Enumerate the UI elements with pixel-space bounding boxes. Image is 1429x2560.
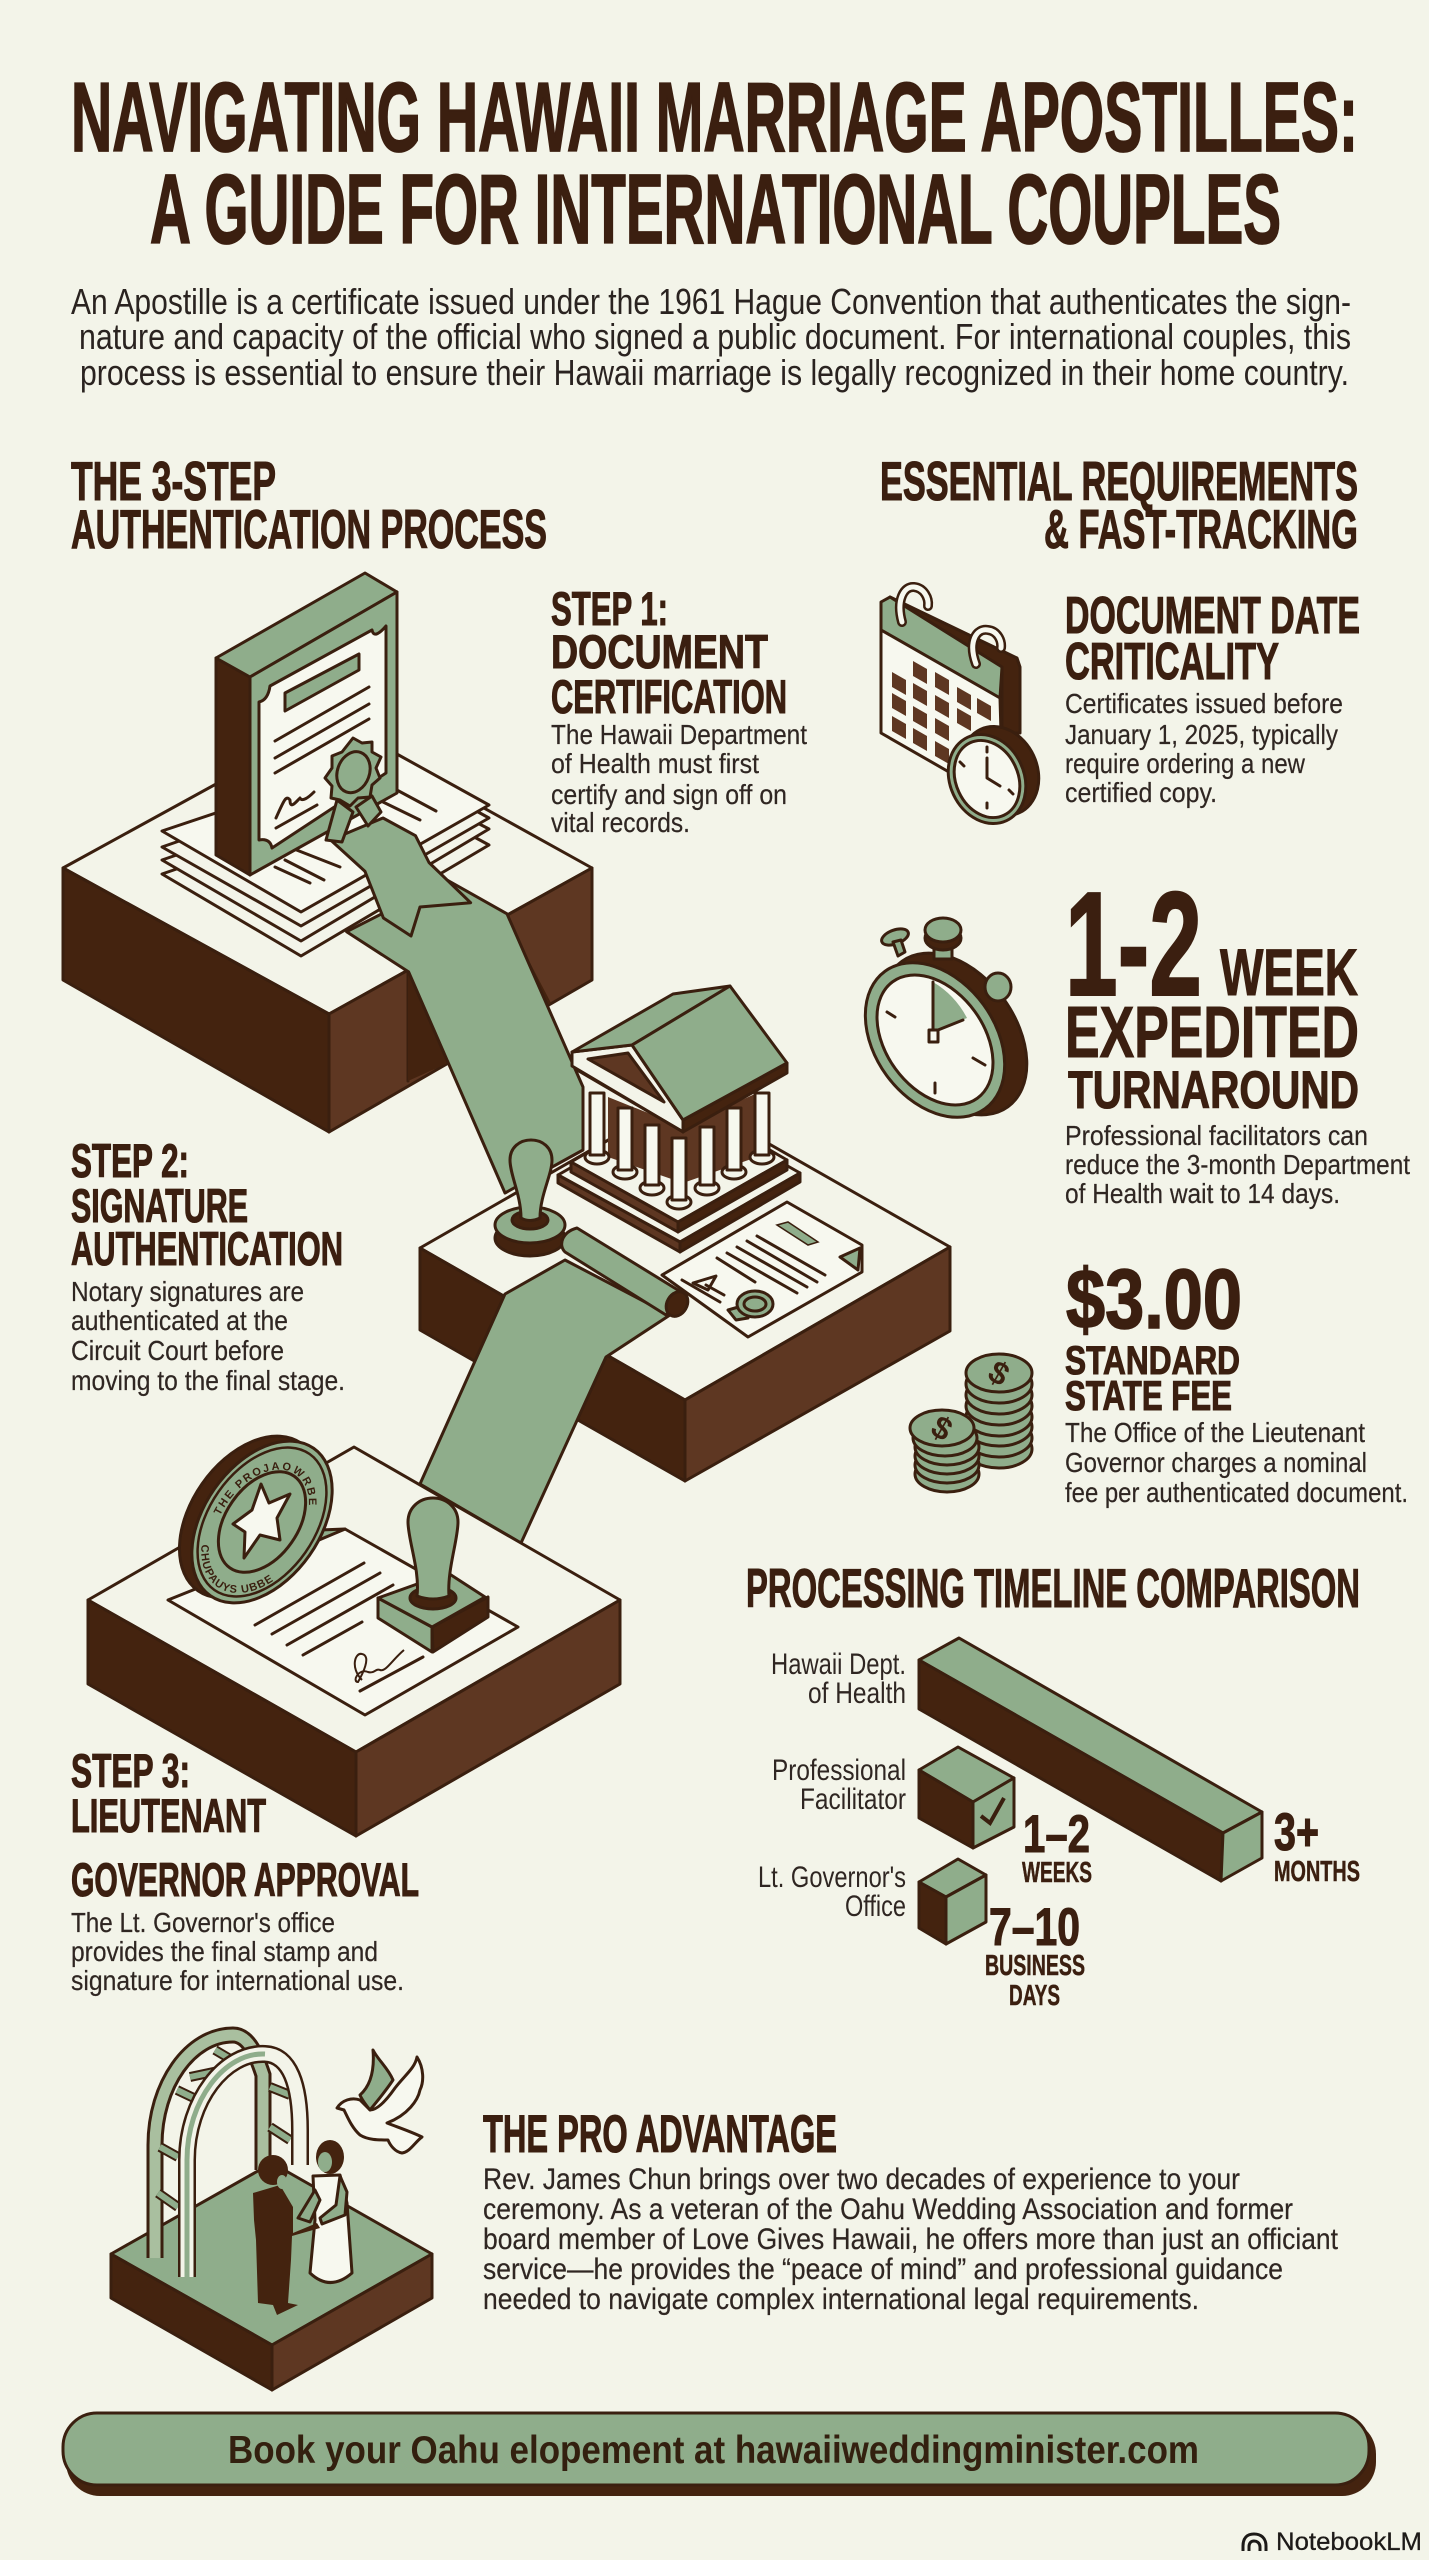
step 2 text: SIGNATURE xyxy=(71,1179,248,1232)
step 2 text: STEP 2: xyxy=(71,1134,189,1187)
call to action button: Book your Oahu elopement at hawaiiweddingminister.com xyxy=(228,2429,1199,2472)
icon: calendar with clock xyxy=(881,587,1053,836)
pro advantage text: service—he provides the “peace of mind” and professional guidance xyxy=(483,2253,1283,2286)
groom xyxy=(253,2155,320,2315)
pro advantage text: board member of Love Gives Hawaii, he offers more than just an officiant xyxy=(483,2223,1339,2256)
state fee stat: STATE FEE xyxy=(1065,1372,1232,1419)
value labels: BUSINESS xyxy=(985,1950,1085,1982)
axis labels: Professional xyxy=(772,1754,906,1787)
axis labels: Hawaii Dept. xyxy=(771,1648,906,1681)
step 1 text xyxy=(551,582,807,838)
heading: 3-step process: THE 3-STEP xyxy=(71,450,276,512)
icon: coin stacks: $ xyxy=(982,1353,1016,1393)
step 3 text: The Lt. Governor's office xyxy=(71,1907,335,1938)
axis labels: of Health xyxy=(808,1677,906,1710)
step 1 text: vital records. xyxy=(551,807,690,838)
state fee stat: $3.00 xyxy=(1066,1252,1242,1346)
step 1 text: of Health must first xyxy=(551,748,759,779)
clock xyxy=(934,714,1053,836)
value labels: 7–10 xyxy=(989,1898,1080,1957)
expedited turnaround stat: Professional facilitators can xyxy=(1065,1120,1368,1151)
bar: Professional Facilitator xyxy=(919,1747,1014,1848)
state fee stat: The Office of the Lieutenant xyxy=(1065,1417,1365,1448)
bride xyxy=(298,2140,352,2282)
illustration: ribbon from step 2 to step 3 xyxy=(420,1228,692,1543)
heading: 3-step process: AUTHENTICATION PROCESS xyxy=(71,498,547,560)
step 3 text: STEP 3: xyxy=(71,1744,190,1797)
expedited turnaround stat: of Health wait to 14 days. xyxy=(1065,1178,1340,1209)
step 2 text: authenticated at the xyxy=(71,1305,288,1336)
icon: coin stacks: $ xyxy=(925,1408,959,1448)
step 2 text: Notary signatures are xyxy=(71,1276,304,1307)
NotebookLM badge: NotebookLM xyxy=(1276,2528,1422,2556)
expedited turnaround stat: WEEK xyxy=(1220,935,1358,1009)
bar: Hawaii Dept of Health xyxy=(919,1638,1262,1881)
document date text: require ordering a new xyxy=(1065,748,1306,779)
step 3 text xyxy=(71,1744,419,1996)
state fee stat: STANDARD xyxy=(1065,1339,1240,1383)
value labels: 1–2 xyxy=(1023,1805,1090,1864)
pro advantage text: Rev. James Chun brings over two decades of experience to your xyxy=(483,2163,1240,2196)
state fee stat xyxy=(1065,1252,1408,1508)
document date text: January 1, 2025, typically xyxy=(1065,719,1338,750)
icon: stopwatch xyxy=(836,918,1056,1144)
step 2 text: moving to the final stage. xyxy=(71,1365,345,1396)
step 1 text: STEP 1: xyxy=(551,582,668,635)
expedited turnaround stat: 1-2 xyxy=(1065,862,1202,1027)
heading: 3-step process xyxy=(71,450,547,560)
wax seal medallion: THE PROJAOWRBE xyxy=(213,1462,317,1514)
axis labels: Office xyxy=(845,1890,906,1923)
value labels xyxy=(985,1803,1360,2012)
step 2 text: Circuit Court before xyxy=(71,1335,284,1366)
intro paragraph xyxy=(71,281,1351,393)
illustration: step 2 block xyxy=(420,986,950,1481)
axis labels: Lt. Governor's xyxy=(758,1861,906,1894)
title xyxy=(71,62,1358,264)
step 2 text: AUTHENTICATION xyxy=(71,1222,343,1275)
step 1 text: certify and sign off on xyxy=(551,779,787,810)
certificate frame xyxy=(216,573,397,875)
value labels: WEEKS xyxy=(1022,1857,1092,1889)
pro advantage text xyxy=(483,2105,1339,2316)
step 1 text: DOCUMENT xyxy=(551,625,768,678)
pro advantage text: ceremony. As a veteran of the Oahu Wedding Association and former xyxy=(483,2193,1293,2226)
stamp on block 2 xyxy=(495,1140,565,1256)
wax seal medallion xyxy=(178,1434,334,1604)
bar chart: processing timeline xyxy=(758,1638,1360,2012)
state fee stat: Governor charges a nominal xyxy=(1065,1447,1367,1478)
expedited turnaround stat xyxy=(1065,862,1410,1209)
document on block 3 xyxy=(168,1529,518,1715)
step 1 text: The Hawaii Department xyxy=(551,719,807,750)
pro advantage text: THE PRO ADVANTAGE xyxy=(483,2105,837,2164)
call to action button xyxy=(63,2413,1376,2496)
document on block 2 xyxy=(662,1202,862,1337)
pro advantage text: needed to navigate complex international legal requirements. xyxy=(483,2283,1199,2316)
icon: certificate seal xyxy=(325,738,381,842)
wax seal medallion: CHUPAUYS UBBE xyxy=(201,1545,273,1593)
illustration: step 1 block with certificate xyxy=(63,573,592,1132)
paper stack xyxy=(162,753,489,956)
step 3 text: signature for international use. xyxy=(71,1965,404,1996)
heading: essential requirements xyxy=(880,450,1358,560)
dove xyxy=(337,2050,423,2153)
step 3 text: provides the final stamp and xyxy=(71,1936,378,1967)
step 2 text xyxy=(71,1134,345,1396)
illustration: wedding couple under arch xyxy=(111,2035,432,2390)
step 1 text: CERTIFICATION xyxy=(551,670,787,723)
step 3 text: GOVERNOR APPROVAL xyxy=(71,1853,419,1906)
axis labels xyxy=(758,1648,906,1923)
illustration: step 3 block xyxy=(86,1434,622,1838)
document date text: CRITICALITY xyxy=(1065,633,1279,691)
value labels: DAYS xyxy=(1009,1980,1060,2012)
step 3 text: LIEUTENANT xyxy=(71,1789,266,1842)
illustration: ribbon from step 1 to step 2 xyxy=(331,818,583,1193)
axis labels: Facilitator xyxy=(800,1783,906,1816)
document date text xyxy=(1065,587,1360,808)
arch xyxy=(155,2035,300,2277)
document date text: certified copy. xyxy=(1065,777,1217,808)
courthouse xyxy=(558,986,800,1252)
icon: coin stacks xyxy=(910,1353,1032,1492)
bar: Lt. Governor's Office xyxy=(919,1859,986,1944)
value labels: MONTHS xyxy=(1274,1856,1360,1888)
value labels: 3+ xyxy=(1274,1803,1319,1862)
document date text: Certificates issued before xyxy=(1065,688,1343,719)
stamp on block 3 xyxy=(378,1498,488,1652)
